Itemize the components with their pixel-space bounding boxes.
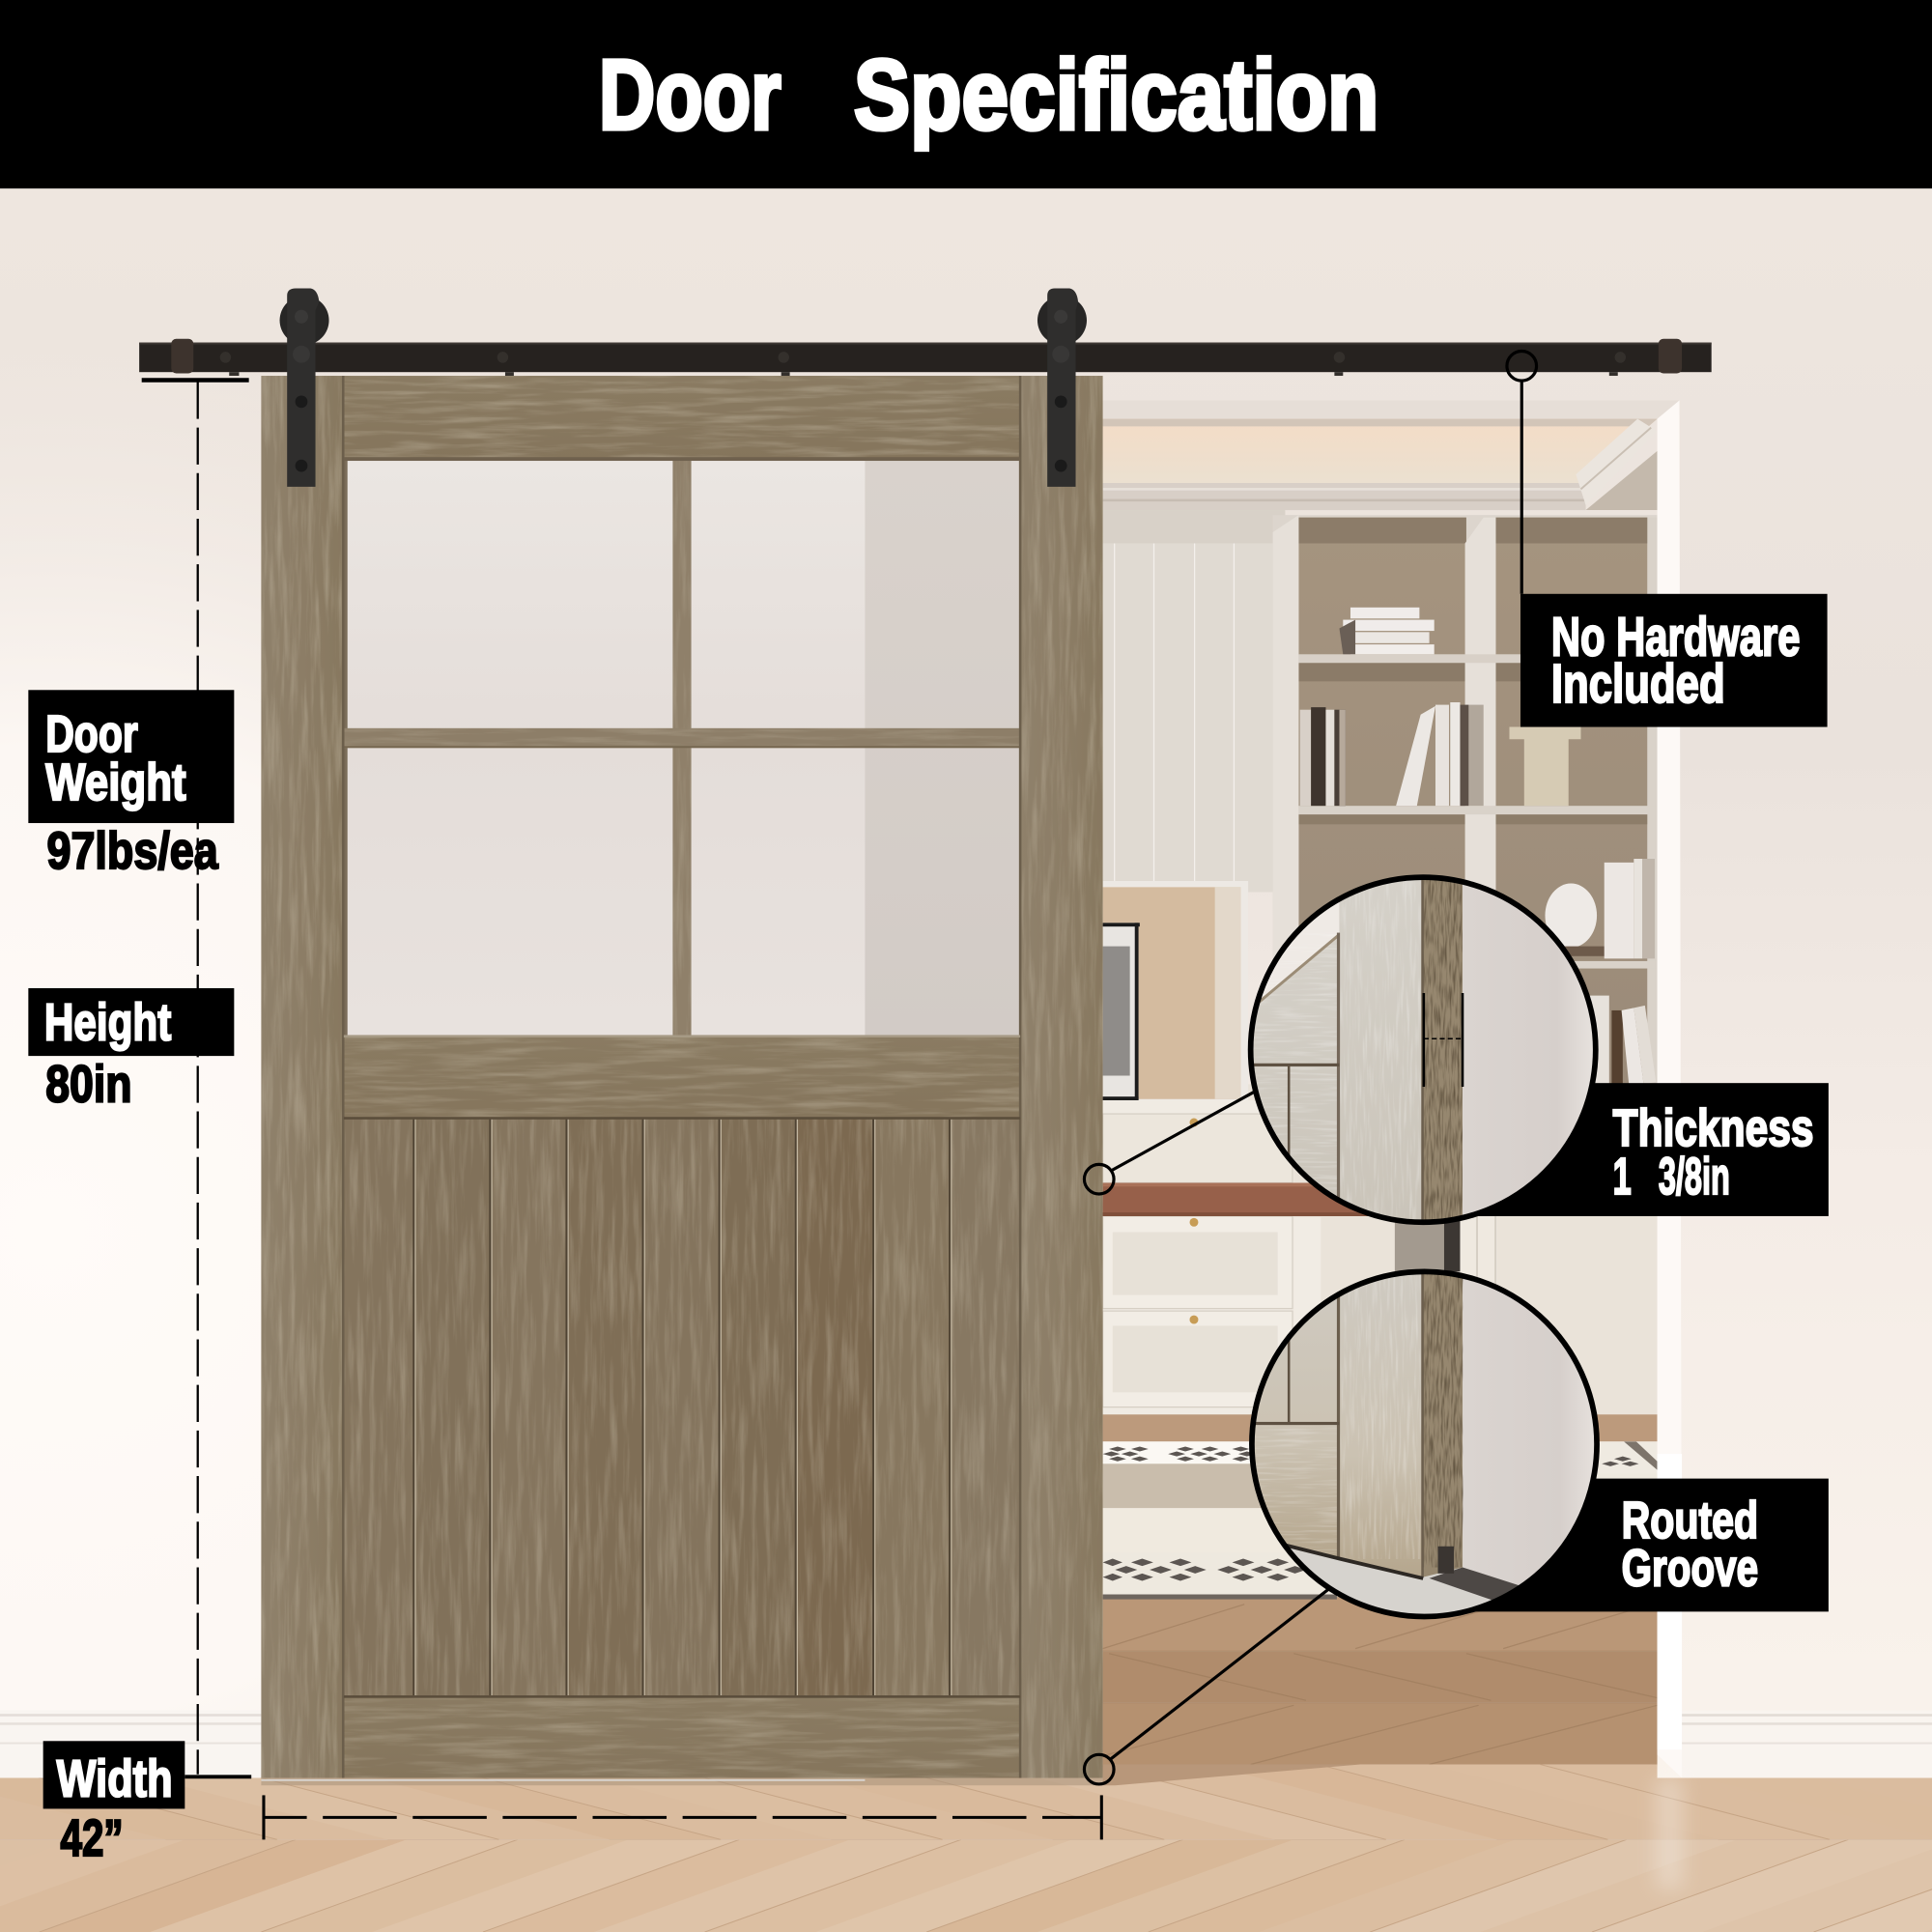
- label: door weight: [28, 690, 234, 880]
- vertical planks: [344, 1119, 1020, 1696]
- lower wall behind cabinets: [1103, 1084, 1658, 1417]
- warm ceiling cove: [1103, 419, 1658, 483]
- callout: routed groove: [1084, 1479, 1829, 1784]
- label: door weight: Weight: [45, 754, 186, 811]
- artwork: [1103, 881, 1248, 1103]
- left stile: [261, 376, 344, 1778]
- floor row two: [0, 1839, 1932, 1932]
- height dimension line: [142, 380, 251, 1776]
- door shadow on floor: [261, 1778, 1103, 1785]
- label: height: [28, 988, 234, 1113]
- title: Specification: [854, 38, 1378, 150]
- width dimension line: [264, 1795, 1101, 1839]
- callout: thickness: [1084, 1083, 1829, 1216]
- header bar: [0, 0, 1932, 188]
- cabinets: [1103, 1100, 1293, 1417]
- callout: no hardware: No Hardware: [1551, 607, 1801, 668]
- callout: no hardware: Included: [1551, 653, 1725, 714]
- label: door weight: 97lbs/ea: [46, 823, 219, 880]
- thickness marker: [1424, 993, 1463, 1087]
- title: [599, 38, 1378, 150]
- rug: [1103, 1441, 1658, 1600]
- callout: routed groove: Routed: [1622, 1492, 1758, 1549]
- sculpture lamp: [1509, 727, 1580, 806]
- label: height: 80in: [45, 1056, 131, 1113]
- rail stops: [171, 339, 1682, 373]
- upright books: [1300, 702, 1484, 806]
- glass panes: [344, 460, 1020, 1037]
- middle rail: [344, 1037, 1020, 1118]
- walnut counter: [1103, 1182, 1386, 1216]
- callout: thickness: Thickness: [1613, 1100, 1814, 1157]
- label: door weight: Door: [45, 706, 138, 763]
- bottom rail: [344, 1696, 1020, 1778]
- label: height: Height: [44, 995, 171, 1052]
- label: width: Width: [57, 1751, 173, 1808]
- doorway jamb: [1658, 401, 1682, 1778]
- shadow at door foot: [1103, 1765, 1360, 1785]
- doorway soffit: [1103, 401, 1680, 419]
- top rail: [344, 376, 1020, 460]
- callout: routed groove: Groove: [1622, 1541, 1758, 1598]
- books stack: [1339, 608, 1435, 654]
- magnifier: routed groove detail: [1251, 1271, 1602, 1623]
- vase and books lower shelf: [1545, 859, 1656, 1084]
- room through doorway: [1103, 401, 1680, 1765]
- floor: [0, 1765, 1932, 1932]
- callout: thickness: 1: [1613, 1149, 1632, 1206]
- title: Door: [599, 38, 781, 150]
- magnifier: door thickness detail: [1251, 877, 1598, 1238]
- crown moulding: [1103, 419, 1658, 510]
- label: width: 42”: [60, 1810, 124, 1867]
- hanger strap left: [280, 288, 329, 487]
- sliding rail: [139, 339, 1712, 376]
- label: width: [43, 1741, 185, 1867]
- callout: no hardware: [1507, 352, 1828, 727]
- light spill below jamb: [1656, 1778, 1683, 1889]
- muntins: [344, 460, 1020, 1037]
- callout: thickness: 3/8in: [1659, 1149, 1730, 1206]
- barn door: [261, 376, 1103, 1778]
- floor row one: [0, 1765, 1932, 1839]
- hanger strap right: [1037, 288, 1087, 487]
- right stile: [1020, 376, 1103, 1778]
- baseboards: [0, 1710, 1932, 1778]
- room floor: [1103, 1414, 1658, 1765]
- bookshelf: [1273, 515, 1658, 1106]
- beadboard wall panel: [1103, 510, 1285, 892]
